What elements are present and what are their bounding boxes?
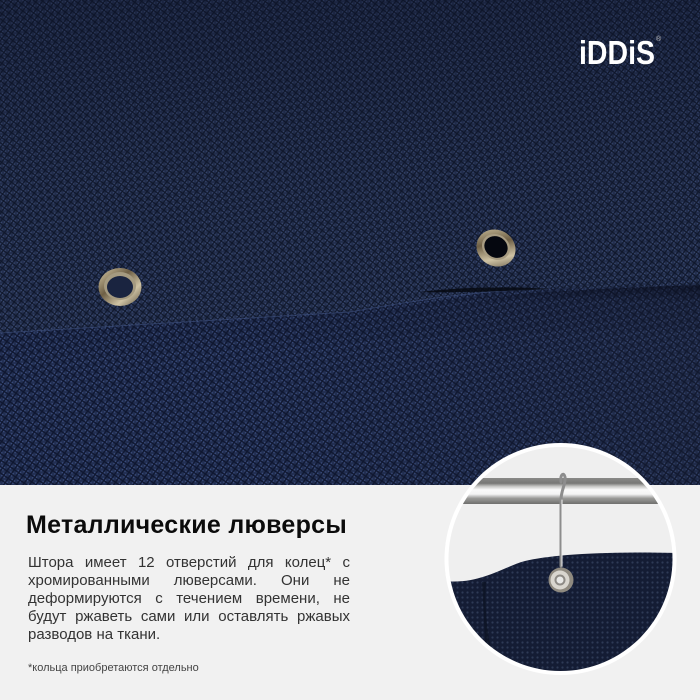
upper fabric layer with hem	[0, 0, 700, 333]
grommet right	[470, 222, 522, 274]
logo: ®	[656, 35, 662, 43]
lower fabric layer	[0, 0, 700, 485]
grommet	[548, 568, 574, 592]
footnote: *кольца приобретаются отдельно	[28, 662, 199, 674]
photo: navy waffle fabric with grommets	[0, 0, 700, 485]
text panel	[0, 485, 700, 700]
grommet left	[98, 268, 142, 306]
title: Металлические люверсы	[26, 511, 347, 539]
inset circle: hook on rail	[444, 443, 676, 675]
body text: Штора имеет 12 отверстий для колец* с хромированными люверсами. Они не деформируются с течением времени, не будут ржаветь сами или оставлять ржавых разводов на ткани.	[28, 554, 350, 643]
logo: iDDiS	[579, 34, 655, 71]
curtain	[450, 552, 672, 671]
rail	[463, 478, 658, 504]
hook	[561, 474, 565, 566]
